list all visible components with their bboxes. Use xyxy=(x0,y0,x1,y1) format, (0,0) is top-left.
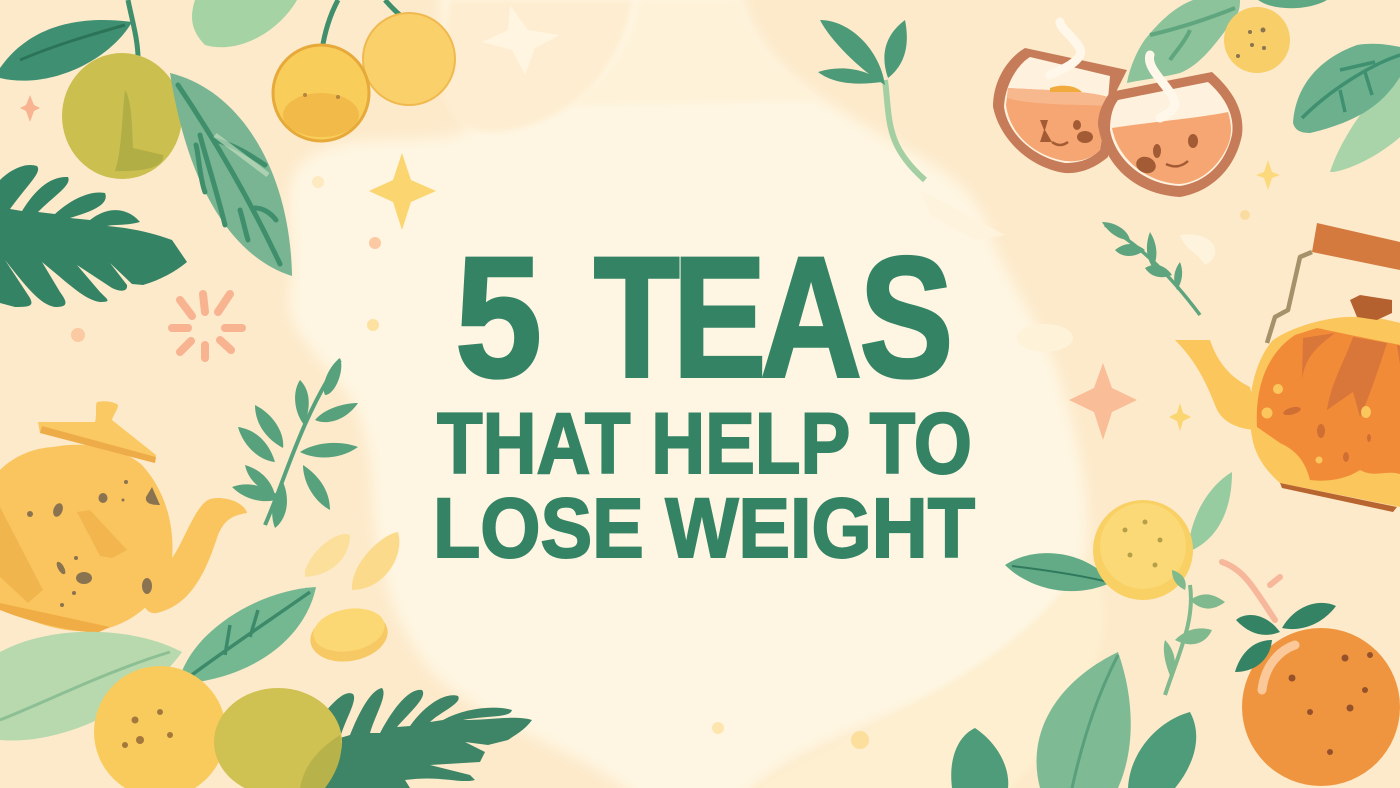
title line: 5 TEAS: 5 xyxy=(455,221,542,413)
title xyxy=(433,221,975,575)
icon: top left leaf cluster with fruit xyxy=(0,0,297,276)
icon: bottom right leaves xyxy=(951,652,1196,788)
icon: left sprig xyxy=(232,358,358,528)
icon: dark palm leaf left xyxy=(0,165,187,307)
icon: sparkles xyxy=(20,95,1280,749)
title line: LOSE WEIGHT: LOSE WEIGHT xyxy=(433,481,975,575)
icon: orange fruit xyxy=(1222,562,1400,786)
icon: top right leaves xyxy=(1293,44,1400,172)
icon: right sprig xyxy=(1102,222,1200,315)
icon: small lemon slices xyxy=(305,532,399,667)
icon: right lemon and leaves xyxy=(1005,472,1232,695)
title line: THAT HELP TO: THAT HELP TO xyxy=(437,396,972,492)
icon: top centre-right sprig xyxy=(818,20,925,180)
icon: pink burst xyxy=(172,294,242,358)
icon: two tea cups with steam xyxy=(993,0,1327,197)
title line: 5 TEAS: TEAS xyxy=(594,222,953,414)
icon: top cherries xyxy=(273,0,455,141)
icon: right teapot xyxy=(1175,223,1400,512)
icon: bottom left leaves and fruit xyxy=(0,587,532,788)
icon: left teapot xyxy=(0,401,247,633)
